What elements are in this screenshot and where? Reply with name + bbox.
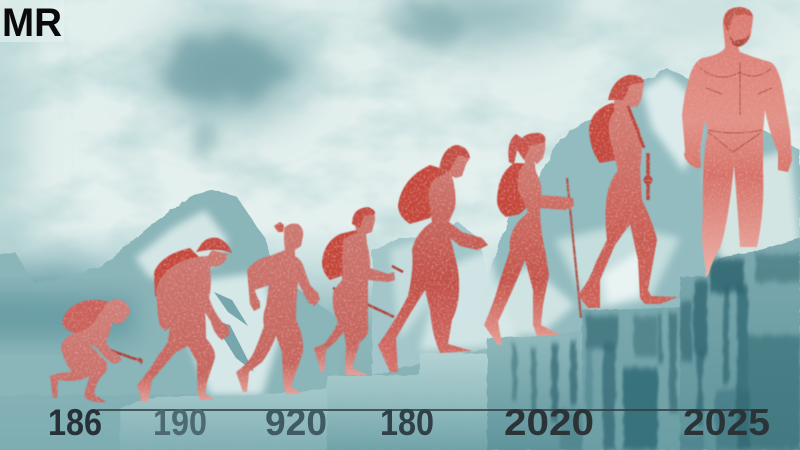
step: third ledge [582, 307, 680, 450]
figure 3: walker with hair bun [236, 222, 320, 394]
figure 4: walker with pack and hammer [314, 207, 403, 375]
figure 6: woman with ponytail and staff [484, 133, 581, 345]
figure 5: walker with large pack [378, 145, 488, 372]
figure 7: hiker with pack and pole [578, 75, 678, 308]
year: 2020: 2020 [504, 402, 594, 443]
step: low ground [120, 388, 330, 450]
step: second ledge [487, 336, 582, 450]
mountain: left peak [0, 190, 340, 395]
step: top ledge [680, 238, 800, 450]
timeline year labels [48, 402, 770, 443]
figure 8: tall modern man [682, 7, 792, 278]
figure 2: walker with cap [137, 238, 232, 402]
step: first ledge [327, 353, 487, 450]
year: 186: 186 [48, 402, 102, 443]
year: 920: 920 [265, 402, 327, 443]
year: 2025: 2025 [683, 402, 770, 443]
mountain: right peak [420, 68, 800, 350]
cliffs: stepped ledges [120, 238, 800, 450]
timeline axis line [97, 409, 768, 411]
paint drips on cliffs [512, 254, 800, 450]
year: 180: 180 [380, 402, 434, 443]
logo text: MR: MR [2, 1, 62, 45]
year: 190: 190 [153, 402, 207, 443]
figure 1: crouching with hammer [50, 299, 143, 402]
mountain: centre peak [372, 222, 500, 375]
